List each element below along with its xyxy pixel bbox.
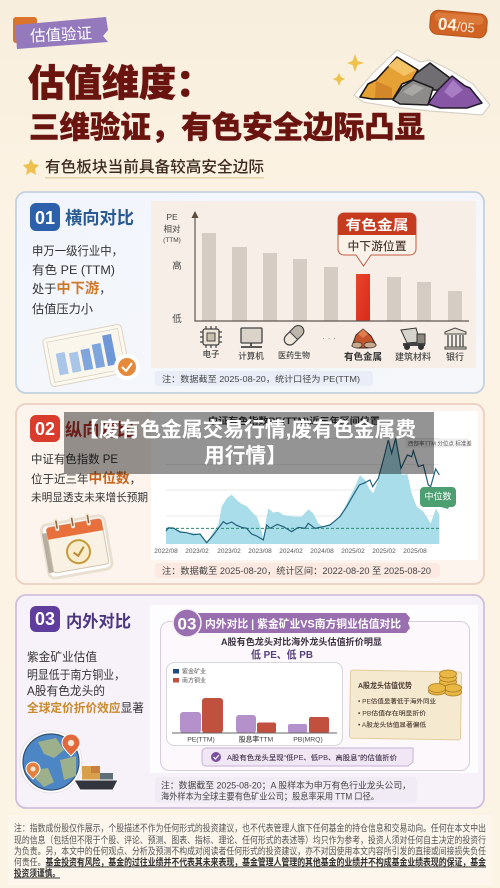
category labels: 计算机	[238, 351, 264, 361]
y axis labels: (TTM)	[163, 237, 181, 244]
text: 02 description	[31, 452, 148, 504]
ribbon heading	[173, 609, 410, 637]
category labels: 银行	[446, 351, 464, 362]
text: 03 description: A股有色龙头的	[27, 684, 105, 698]
date labels: 2023/02	[217, 548, 241, 555]
heading: 01: 横向对比	[65, 208, 134, 228]
date labels: 2025/02	[341, 548, 365, 555]
chart: PE three-year range	[151, 411, 478, 560]
legend: 西部率TTM 分位点 标准差	[408, 440, 472, 448]
note: 03: 注：数据截至 2025-08-20；A 股样本为申万有色行业龙头公司，	[161, 780, 411, 790]
headline	[221, 636, 382, 661]
text: 01 description: 处于中下游，	[32, 279, 111, 297]
date labels: 2024/08	[310, 548, 334, 555]
callout: median	[420, 487, 456, 509]
text: 03 description: 紫金矿业估值	[27, 650, 97, 664]
headline: A股有色龙头对比海外龙头估值折价明显	[221, 636, 382, 647]
conclusion pill: A股有色龙头呈现“低PE、低PB、高股息”的估值折价	[227, 753, 397, 762]
icon: tablet with bars	[42, 324, 140, 387]
headline: 低 PE、低 PB	[251, 648, 313, 661]
callout: 有色金属: 中下游位置	[348, 239, 406, 253]
heading: 02: 纵向对比	[65, 420, 134, 440]
tag: 估值验证	[13, 17, 108, 49]
text: 02 description: 未明显透支未来增长预期	[31, 491, 148, 504]
page badge 04/05	[429, 10, 488, 38]
bar chart: 股息率TTM	[239, 734, 274, 744]
note card: A-share advantage: A股龙头估值优势	[358, 680, 412, 690]
note card: A-share advantage: • PE估值显著低于海外同业	[358, 698, 436, 706]
note: 02: 注：数据截至 2025-08-20，统计区间：2022-08-20 至 2025-08-20	[162, 565, 431, 576]
icon: globe and ship	[20, 731, 118, 793]
note card: A-share advantage	[349, 670, 462, 740]
ribbon heading: 内外对比 | 紫金矿业VS南方铜业估值对比	[205, 616, 401, 630]
chart: PE bar ranking	[151, 201, 476, 368]
date labels: 2025/02	[372, 548, 396, 555]
ribbon heading: 03	[178, 614, 196, 634]
note: 02	[155, 563, 440, 578]
callout: median: 中位数	[424, 490, 452, 502]
category labels: 医药生物	[278, 350, 310, 360]
heading: 02: 02	[35, 419, 55, 439]
heading: 03: 03	[35, 609, 55, 629]
text: 01 description: 估值压力小	[32, 301, 93, 316]
icon: mixer truck	[401, 328, 425, 350]
icon: computer	[241, 328, 262, 347]
tag: 估值验证: 估值验证	[30, 24, 92, 46]
icon: pill	[282, 323, 306, 347]
overlay banner	[64, 412, 434, 474]
note: 03	[155, 777, 417, 803]
y axis labels: 高	[172, 260, 182, 272]
note: 01: 注：数据截至 2025-08-20，统计口径为 PE(TTM)	[162, 374, 360, 384]
dots: · · ·	[322, 333, 336, 343]
category labels: 电子	[202, 349, 220, 359]
subtitle with star: 有色板块当前具备较高安全边际	[45, 157, 264, 176]
text: 03 description	[27, 650, 144, 715]
icon: coins	[428, 670, 462, 696]
icon: chip	[200, 326, 222, 348]
bar chart: 南方铜业	[182, 676, 206, 684]
panel: 02 vertical comparison	[16, 404, 484, 584]
text: 01 description	[32, 243, 123, 316]
overlay banner: 【废有色金属交易行情,废有色金属费	[78, 418, 416, 442]
category labels	[202, 349, 464, 363]
note card: A-share advantage: • A股龙头估值显著偏低	[358, 721, 427, 729]
note card: A-share advantage: • PB估值存在明显折价	[358, 710, 427, 718]
chart card: Zijin vs Southern Copper	[150, 605, 478, 773]
text: 03 description: 全球定价折价效应显著	[27, 701, 144, 715]
date labels: 2023/08	[248, 548, 272, 555]
heading: 03: 内外对比	[66, 612, 131, 631]
text: 01 description: 申万一级行业中，	[32, 243, 123, 258]
overlay banner: 用行情】	[204, 444, 287, 468]
y axis labels: PE	[166, 212, 178, 222]
category labels: 有色金属	[344, 351, 382, 363]
icon: calendar	[40, 512, 113, 579]
bar chart: 紫金矿业	[182, 668, 206, 676]
text: 03 description: 明显低于南方铜业，	[27, 668, 125, 682]
date labels	[154, 548, 427, 555]
callout: 有色金属: 有色金属	[346, 217, 408, 233]
date labels: 2024/02	[279, 548, 303, 555]
bar chart	[166, 662, 342, 746]
title line 2: 三维验证，有色安全边际凸显	[29, 110, 425, 145]
illustration: ore rocks and sparkles	[333, 50, 490, 115]
icon: rock	[352, 329, 376, 348]
bars	[202, 233, 462, 321]
category labels: 建筑材料	[395, 351, 431, 362]
text: 02 description: 位于近三年中位数，	[31, 470, 141, 486]
legend	[406, 439, 472, 448]
date labels: 2025/08	[403, 548, 427, 555]
bar chart: PE(TTM)	[187, 736, 215, 744]
heading: 01	[30, 203, 134, 231]
heading: 01: 01	[35, 208, 55, 228]
note: 01	[155, 371, 373, 386]
y axis labels: 相对	[163, 224, 181, 234]
text: 01 description: 有色 PE (TTM)	[32, 263, 115, 277]
title line 1: 估值维度：	[28, 63, 213, 104]
date labels: 2022/08	[154, 548, 178, 555]
icon: bank	[445, 328, 466, 349]
bar chart: PB(MRQ)	[293, 736, 323, 744]
heading: 02	[30, 415, 134, 442]
footer disclaimer	[8, 815, 492, 885]
conclusion pill	[202, 748, 413, 766]
date labels: 2023/02	[185, 548, 209, 555]
callout: 有色金属	[338, 213, 416, 266]
note: 03: 海外样本为全球主要有色矿业公司；股息率采用 TTM 口径。	[161, 790, 379, 802]
text: 02 description: 中证有色指数 PE	[31, 452, 118, 466]
footer disclaimer: 投资须谨慎。	[14, 868, 60, 880]
y axis labels: 低	[172, 313, 182, 325]
chart: PE three-year range: 中证有色指数PE(TTM)近三年区间位置	[208, 415, 380, 426]
heading: 03	[30, 606, 131, 632]
y axis labels	[163, 212, 182, 325]
page badge 04/05: 04/05	[437, 14, 476, 36]
panel: 01 horizontal comparison	[16, 192, 484, 393]
panel: 03 domestic vs overseas	[16, 595, 484, 808]
